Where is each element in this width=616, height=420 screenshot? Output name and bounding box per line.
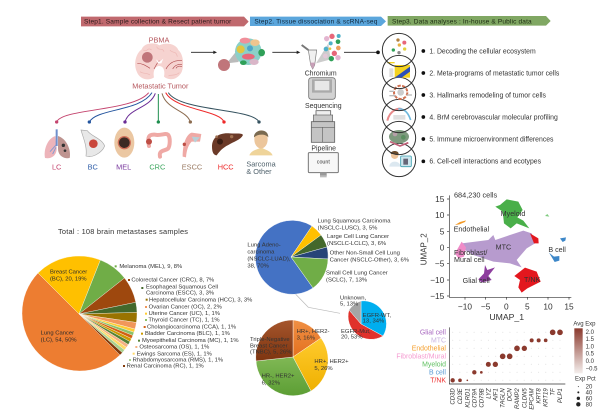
analyses list — [421, 48, 560, 166]
subtype pie labels: Lung Squamous Carcinoma — [318, 219, 391, 225]
color legend — [573, 322, 598, 373]
pie chart labels: all samples: Hepatocellular Carcinoma (HCC), 3, 3% — [149, 298, 252, 304]
subtype pie labels: 6, 32% — [262, 380, 281, 386]
color legend: 0.5 — [586, 352, 595, 358]
cancer type labels — [52, 159, 277, 176]
cluster labels: Endothelial — [454, 226, 489, 234]
cancer type labels: ESCC — [182, 163, 203, 172]
gene labels: EPCAM — [530, 388, 536, 410]
axis tick labels: −10 — [458, 302, 472, 312]
icon: esophagus — [183, 133, 201, 157]
subtype pie labels: EGFR-Mut, — [341, 329, 371, 335]
axis title: UMAP_2: UMAP_2 — [420, 233, 429, 265]
metastatic tumor label: Metastatic Tumor — [132, 81, 189, 90]
cancer type labels: HCC — [218, 163, 234, 172]
color legend: −0.5 — [586, 366, 598, 372]
cluster: fibroblast — [455, 242, 466, 258]
axis tick labels: 10 — [435, 210, 445, 220]
axis tick labels: 15 — [564, 302, 574, 312]
subtype pie labels: 13, 34% — [363, 319, 385, 325]
color legend: 1.5 — [586, 337, 595, 343]
gene labels: RAMP2 — [515, 388, 521, 409]
axes — [447, 195, 571, 300]
icon: computer running count: count — [317, 159, 330, 165]
step 2 banner: Step2. Tissue dissociation & scRNA-seq — [254, 19, 378, 26]
row labels: Glial cell — [420, 330, 446, 337]
cluster labels: Myeloid — [501, 210, 525, 218]
analysis circle 2 — [382, 55, 416, 89]
pie chart labels: all samples: Ovarian Cancer (OC), 2, 2% — [149, 304, 222, 310]
subtype pie labels: 5, 13% — [340, 301, 359, 307]
subtype pie labels: HR+, HER2+ — [314, 359, 349, 365]
gene labels — [451, 387, 564, 410]
cluster labels — [454, 210, 566, 285]
subtype pie labels — [247, 219, 410, 386]
axis tick labels: −5 — [481, 302, 491, 312]
pie chart labels: all samples: Rhabdomyosarcoma (RMS), 1, 1% — [133, 358, 223, 364]
cancer type labels: MEL — [116, 163, 131, 172]
row labels: Fibroblast/Mural — [396, 354, 446, 361]
color legend: 2.0 — [586, 330, 595, 336]
subtype pie labels: (TNBC), 5, 26% — [250, 349, 292, 355]
pie chart labels: all samples: Uterine Cancer (UC), 1, 1% — [149, 311, 220, 317]
gene labels: TF — [551, 388, 557, 396]
pie chart labels: all samples: Cholangiocarcinoma (CCA), 1, 1% — [147, 324, 236, 330]
size legend: Exp Pct — [575, 377, 596, 383]
subtype pie labels: Large Cell Lung Cancer — [327, 234, 389, 240]
row labels — [396, 330, 446, 385]
arrows: cancer types to tumor — [55, 93, 261, 124]
cluster: myeloid — [495, 199, 529, 228]
pie chart: all samples — [22, 256, 137, 371]
axis tick labels: 0 — [440, 242, 445, 252]
color legend: Avg Exp — [573, 322, 596, 328]
axis tick labels: 10 — [543, 302, 553, 312]
UMAP plot — [420, 190, 574, 312]
sequencing panel — [302, 33, 560, 177]
row labels: T/NK — [430, 378, 446, 385]
cancer type labels: CRC — [149, 163, 166, 172]
cancer type labels: & Other — [246, 167, 272, 176]
subtype pie labels: (SCLC), 7, 13% — [326, 277, 368, 283]
axis tick labels: −15 — [430, 291, 445, 301]
color legend: 0.0 — [586, 359, 595, 365]
pie chart labels: all samples: Ewings Sarcoma (ES), 1, 1% — [137, 351, 212, 357]
size legend: 80 — [586, 402, 593, 408]
icon: chromium instrument — [309, 78, 335, 99]
cancer type labels: LC — [52, 163, 62, 172]
cluster: T/NK — [514, 233, 541, 293]
arrow: tumor to cells — [191, 51, 217, 54]
expression dots — [450, 329, 563, 382]
workflow steps — [81, 16, 551, 26]
analyses list: 5. Immune microenvironment differences — [429, 136, 554, 143]
pie chart: EGFR status — [348, 301, 386, 339]
analyses list: 4. BrM cerebrovascular molecular profiling — [429, 114, 558, 121]
subtype pie labels: (NSCLC-LUAD), — [247, 257, 291, 263]
cancer type labels: BC — [88, 163, 98, 172]
cluster: B cell — [549, 237, 566, 262]
subtype pie labels: HR+, HER2- — [297, 329, 330, 335]
icon: single cells and tube — [302, 34, 341, 69]
PBMA label: PBMA — [149, 36, 169, 45]
cell count: 684,230 cells — [454, 190, 498, 199]
subtype pie labels: (NSCLC-LCLC), 3, 6% — [327, 241, 387, 247]
cluster labels: T/NK — [524, 276, 541, 284]
subtype pie labels: carcinoma — [247, 250, 275, 256]
pie chart labels: all samples: Carcinoma (ESCC), 3, 3% — [146, 291, 214, 297]
analysis circle 5 — [382, 121, 416, 155]
pie chart labels: all samples: Colorectal Cancer (CRC), 8, 7% — [131, 278, 214, 284]
pie chart labels: all samples: Breast Cancer — [50, 270, 87, 276]
subtype pie labels: 20, 53% — [341, 335, 363, 341]
pipeline label: Pipeline — [311, 146, 336, 153]
cluster labels: B cell — [548, 246, 566, 254]
size legend: 60 — [586, 396, 593, 402]
cluster: MTC — [462, 231, 535, 267]
subtype pie labels: Small Cell Lung Cancer — [326, 270, 388, 276]
cluster: endothelial — [455, 220, 466, 225]
pie chart labels: all samples: Bladder Carcinoma (BLC), 1, 1% — [145, 331, 230, 337]
icon: liver — [212, 133, 243, 155]
icon: brain with tumor — [135, 43, 183, 79]
row labels: Endothelial — [412, 346, 446, 353]
subtype pie labels: Cancer (NSCLC-Other), 3, 6% — [330, 258, 410, 264]
axis tick labels: −5 — [435, 259, 445, 269]
analysis circle 3 — [382, 77, 416, 111]
cluster labels: MTC — [496, 243, 511, 251]
pie chart labels: all samples: Myoepithelial Carcinoma (MC), 1, 1% — [142, 338, 239, 344]
connector: lung pie to EGFR pie — [296, 294, 340, 313]
chromium label: Chromium — [305, 70, 337, 77]
subtype pie labels: 38, 70% — [247, 263, 270, 269]
row labels: B cell — [429, 370, 446, 377]
pie chart: breast cancer subtypes — [256, 320, 328, 396]
step 1 banner: Step1. Sample collection & Resect patient tumor — [84, 19, 232, 26]
dot plot — [396, 322, 598, 410]
step 2 banner — [250, 17, 386, 26]
axis tick labels — [430, 194, 574, 312]
background dots — [453, 332, 560, 380]
arrow: pipeline to analyses — [344, 50, 380, 54]
gene labels: KRT19 — [544, 388, 550, 407]
icon: colon — [146, 134, 170, 157]
gene labels: CD79A — [472, 388, 478, 408]
subtype pie labels: HR-, HER2+ — [262, 374, 295, 380]
pie chart labels: all samples: Thyroid Cancer (TC), 1, 1% — [148, 317, 220, 323]
subtype pie labels: Triple-Negative — [250, 337, 290, 343]
gene labels: KLRD1 — [465, 388, 471, 408]
analysis circle 6 — [382, 143, 416, 177]
pie chart: lung cancer subtypes — [255, 220, 328, 294]
icon: dissociated tumor cells — [218, 38, 265, 71]
analysis circle 4 — [382, 99, 416, 133]
cluster labels: Glial cell — [463, 277, 490, 285]
cancer type labels: Sarcoma — [246, 159, 277, 168]
gene labels: AIF1 — [493, 388, 499, 402]
step 3 banner — [388, 16, 551, 26]
pie chart labels: all samples: Esophageal Squamous Cell — [146, 285, 218, 291]
gene labels: KRT8 — [537, 388, 543, 404]
icon: sequencer — [311, 111, 335, 142]
gene labels: LYZ — [486, 388, 492, 399]
pie chart labels: all samples: Melanoma (MEL), 9, 8% — [119, 264, 182, 270]
axis title: UMAP_1: UMAP_1 — [489, 312, 524, 322]
gene labels: DCN — [508, 388, 514, 401]
small green cluster — [545, 214, 549, 217]
axis tick labels: 5 — [525, 302, 530, 312]
gene labels: PLP1 — [558, 388, 564, 403]
axis tick labels: 0 — [504, 302, 509, 312]
chart title: Total : 108 brain metastases samples — [58, 227, 188, 236]
row labels: MTC — [431, 338, 446, 345]
axes — [449, 327, 565, 384]
analyses list: 2. Meta-programs of metastatic tumor cells — [429, 70, 560, 77]
step 1 banner — [81, 17, 249, 26]
cluster labels: Mural cell — [454, 256, 485, 264]
analyses list: 3. Hallmarks remodeling of tumor cells — [429, 92, 547, 99]
subtype pie labels: Breast Cancer — [250, 343, 288, 349]
axis tick labels: −10 — [430, 275, 445, 285]
gene labels: CD3E — [458, 387, 464, 404]
analysis circle 1 — [382, 33, 416, 67]
axis tick labels: 15 — [435, 194, 445, 204]
subtype pie labels: 3, 16% — [297, 336, 316, 342]
pie chart labels: all samples: Osteosarcoma (OS), 1, 1% — [139, 345, 209, 351]
icon: lungs — [45, 129, 70, 158]
cluster labels: Fibroblast/ — [454, 249, 487, 257]
gene labels: CD3D — [451, 388, 457, 405]
subtype pie labels: EGFR-WT, — [363, 313, 391, 319]
arrow: cells to chromium — [272, 51, 300, 54]
axis tick labels: 5 — [440, 226, 445, 236]
size legend: 20 — [586, 385, 593, 391]
gene labels: CLDN5 — [522, 388, 528, 408]
gene labels: TAGLN — [501, 388, 507, 408]
pie chart labels: all samples: (BC), 20, 19% — [50, 277, 87, 283]
row labels: Myeloid — [422, 362, 446, 369]
size legend — [575, 377, 596, 408]
pie chart labels: all samples: Lung Cancer — [41, 331, 74, 337]
cluster: glial — [478, 265, 495, 283]
gene labels: CD79B — [479, 388, 485, 408]
subtype pie labels: Unknown, — [340, 295, 366, 301]
color legend: 1.0 — [586, 344, 595, 350]
analyses list: 6. Cell-cell interactions and ecotypes — [429, 159, 542, 166]
icon: person — [249, 130, 273, 155]
step 3 banner: Step3. Data analyses : In-house & Public data — [392, 19, 532, 26]
pie chart labels: all samples: (LC), 54, 50% — [41, 338, 77, 344]
subtype pie labels: 5, 26% — [314, 366, 333, 372]
pie chart labels: all samples: Renal Carcinoma (RC), 1, 1% — [127, 364, 204, 370]
icon: computer running count — [308, 153, 338, 177]
pie chart labels: all samples — [41, 264, 252, 370]
sequencing label: Sequencing — [305, 103, 342, 110]
sample collection panel — [45, 36, 300, 176]
subtype pie labels: Lung Adeno- — [247, 242, 281, 248]
icon: melanoma — [114, 128, 134, 158]
subtype pie labels: Other Non-Small Cell Lung — [330, 251, 400, 257]
subtype pie labels: (NSCLC-LUSC), 3, 5% — [318, 226, 378, 232]
icon: breast — [81, 130, 105, 157]
size legend: 40 — [586, 390, 593, 396]
analyses list: 1. Decoding the cellular ecosystem — [429, 48, 536, 55]
